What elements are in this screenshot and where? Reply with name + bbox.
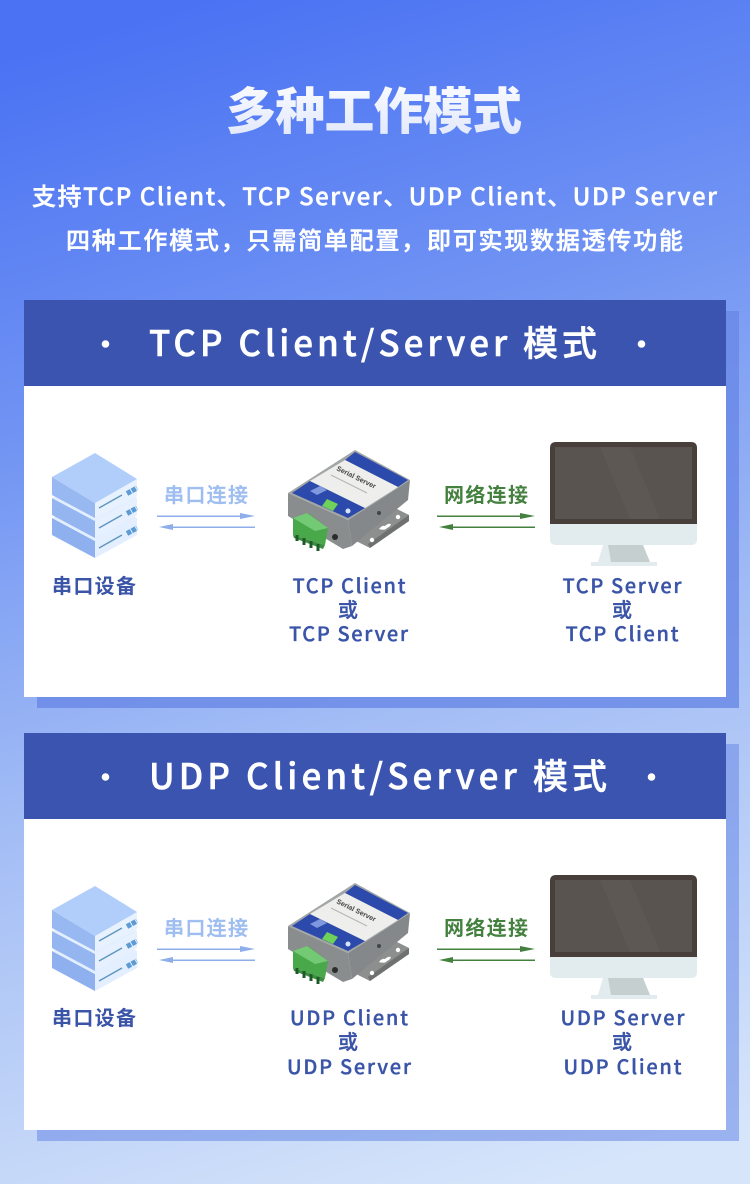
label: UDP peer mode: UDP Server [560, 1002, 685, 1031]
title: 多种工作模式 [226, 72, 522, 144]
panel: UDP mode [24, 733, 739, 1141]
panel shadow [37, 744, 739, 1141]
label: UDP peer mode: UDP Client [564, 1051, 682, 1080]
panel body [24, 300, 726, 697]
label: UDP peer mode: 或 [612, 1026, 632, 1055]
label: UDP device mode: 或 [338, 1026, 358, 1055]
label: serial device: 串口设备 [52, 1002, 136, 1031]
arrows: serial connection [157, 946, 255, 963]
icon: serial device [52, 453, 137, 558]
arrows: network connection [437, 946, 535, 963]
label: serial connection: 串口连接 [164, 912, 248, 941]
arrows: network connection [437, 513, 535, 530]
label: TCP device mode: 或 [338, 594, 358, 623]
panel: TCP mode [24, 300, 739, 708]
label: UDP device mode: UDP Server [287, 1051, 412, 1080]
icon: monitor [550, 875, 697, 999]
icon: serial server device: Serial Server [335, 466, 377, 491]
label: TCP peer mode [562, 570, 682, 647]
panel header [24, 733, 726, 819]
icon: serial server device: Serial Server [335, 899, 377, 924]
label: serial connection: 串口连接 [164, 479, 248, 508]
label: UDP device mode [287, 1002, 412, 1080]
icon: serial server device [288, 883, 410, 984]
intro text: 四种工作模式，只需简单配置，即可实现数据透传功能 [66, 221, 683, 256]
panel header [24, 300, 726, 386]
panel header: UDP Client/Server 模式 [149, 749, 607, 800]
label: TCP device mode: TCP Server [289, 618, 409, 647]
label: TCP device mode [289, 570, 409, 647]
panel body [24, 733, 726, 1130]
label: TCP peer mode: TCP Client [566, 618, 679, 647]
label: network connection: 网络连接 [444, 479, 528, 508]
panel shadow [37, 311, 739, 708]
label: UDP device mode: UDP Client [290, 1002, 408, 1031]
icon: serial device [52, 886, 137, 991]
label: TCP peer mode: TCP Server [562, 570, 682, 599]
label: TCP peer mode: 或 [612, 594, 632, 623]
label: TCP device mode: TCP Client [292, 570, 406, 599]
label: UDP peer mode [560, 1002, 685, 1080]
icon: serial server device [288, 450, 410, 551]
label: network connection: 网络连接 [444, 912, 528, 941]
icon: monitor [550, 442, 697, 566]
label: serial device: 串口设备 [52, 570, 136, 599]
panel header: TCP Client/Server 模式 [149, 316, 597, 367]
intro text: 支持TCP Client、TCP Server、UDP Client、UDP Server [32, 177, 717, 212]
intro text [32, 177, 717, 256]
arrows: serial connection [157, 513, 255, 530]
